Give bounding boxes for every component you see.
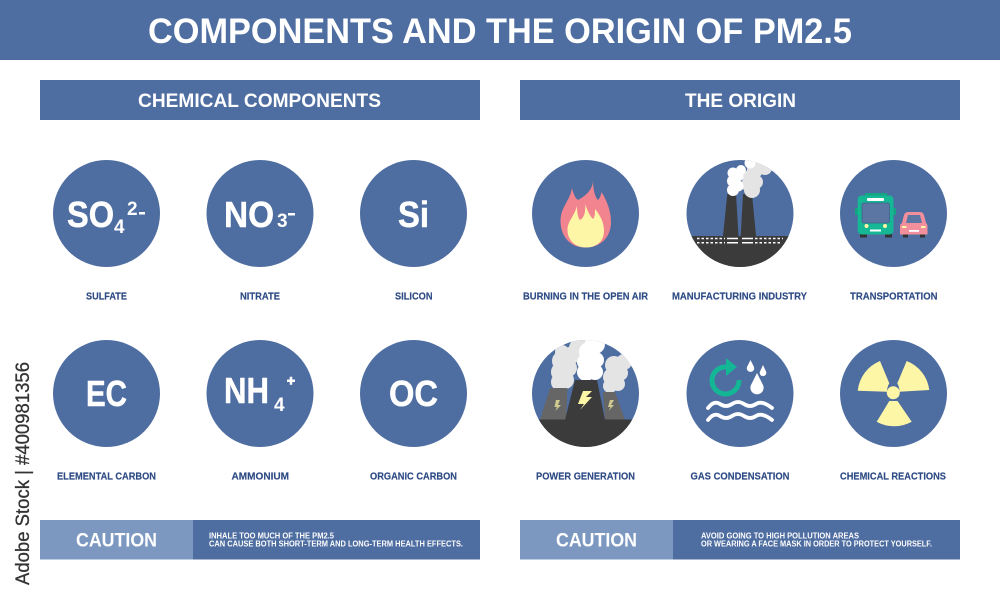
- component: sulfate: 2: [127, 199, 138, 220]
- title banner: [0, 0, 1000, 60]
- component: sulfate: [53, 160, 160, 302]
- heading: chemical components: CHEMICAL COMPONENTS: [138, 91, 381, 112]
- origin: transportation: [840, 160, 947, 302]
- component: organic carbon: ORGANIC CARBON: [370, 470, 457, 482]
- caution bar: left: CAUTION: [76, 530, 157, 552]
- component: silicon: SILICON: [395, 290, 432, 302]
- caution bar: left: INHALE TOO MUCH OF THE PM2.5: [209, 532, 335, 540]
- origin: manufacturing industry: [672, 155, 807, 302]
- origin: chemical reactions: CHEMICAL REACTIONS: [840, 470, 946, 482]
- component: nitrate: NO: [224, 194, 274, 235]
- component: elemental carbon: ELEMENTAL CARBON: [57, 470, 156, 482]
- icon: waves: [708, 402, 772, 420]
- component: sulfate: SO: [67, 194, 114, 235]
- stock id text: Adobe Stock | #400981356: [13, 362, 34, 585]
- heading: the origin: THE ORIGIN: [685, 91, 796, 112]
- component: organic carbon: [360, 340, 467, 482]
- caution bar: right: [520, 520, 960, 560]
- origin: manufacturing industry: MANUFACTURING INDUSTRY: [672, 290, 807, 302]
- origin: burning in the open air: BURNING IN THE OPEN AIR: [523, 290, 648, 302]
- component: ammonium: AMMONIUM: [232, 470, 289, 482]
- caution bar: left: [40, 520, 480, 560]
- origin: chemical reactions: [840, 340, 947, 482]
- component: ammonium: NH: [224, 370, 269, 411]
- origin: transportation: TRANSPORTATION: [850, 290, 938, 302]
- origin: gas condensation: GAS CONDENSATION: [690, 470, 790, 482]
- component: nitrate: [206, 160, 314, 302]
- origin: gas condensation: [686, 340, 794, 482]
- component: elemental carbon: [53, 340, 160, 482]
- caution bar: right: CAUTION: [556, 530, 637, 552]
- caution bar: left: CAN CAUSE BOTH SHORT-TERM AND LONG-TERM HEALTH EFFECTS.: [209, 540, 463, 549]
- component: ammonium: [206, 340, 314, 482]
- component: ammonium: 4: [274, 395, 285, 416]
- component: organic carbon: OC: [389, 373, 438, 414]
- origin: power generation: [532, 340, 639, 480]
- title banner: COMPONENTS AND THE ORIGIN OF PM2.5: [148, 12, 852, 51]
- component: silicon: [360, 160, 467, 302]
- caution bar: right: AVOID GOING TO HIGH POLLUTION AREAS: [701, 532, 860, 540]
- caution bar: right: OR WEARING A FACE MASK IN ORDER TO PROTECT YOURSELF.: [701, 540, 932, 549]
- heading: the origin: [520, 80, 960, 120]
- origin: power generation: POWER GENERATION: [536, 470, 635, 482]
- component: silicon: Si: [398, 194, 429, 235]
- icon: cycle arrow: [712, 358, 739, 394]
- heading: chemical components: [40, 80, 480, 120]
- origin: burning in the open air: [523, 160, 648, 302]
- icon: car: [900, 212, 928, 238]
- component: elemental carbon: EC: [86, 373, 127, 414]
- component: sulfate: SULFATE: [86, 290, 127, 302]
- component: nitrate: 3: [277, 211, 288, 232]
- icon: bus: [855, 193, 896, 238]
- component: sulfate: 4: [114, 217, 125, 238]
- component: nitrate: NITRATE: [240, 290, 280, 302]
- icon: water drops: [747, 360, 766, 394]
